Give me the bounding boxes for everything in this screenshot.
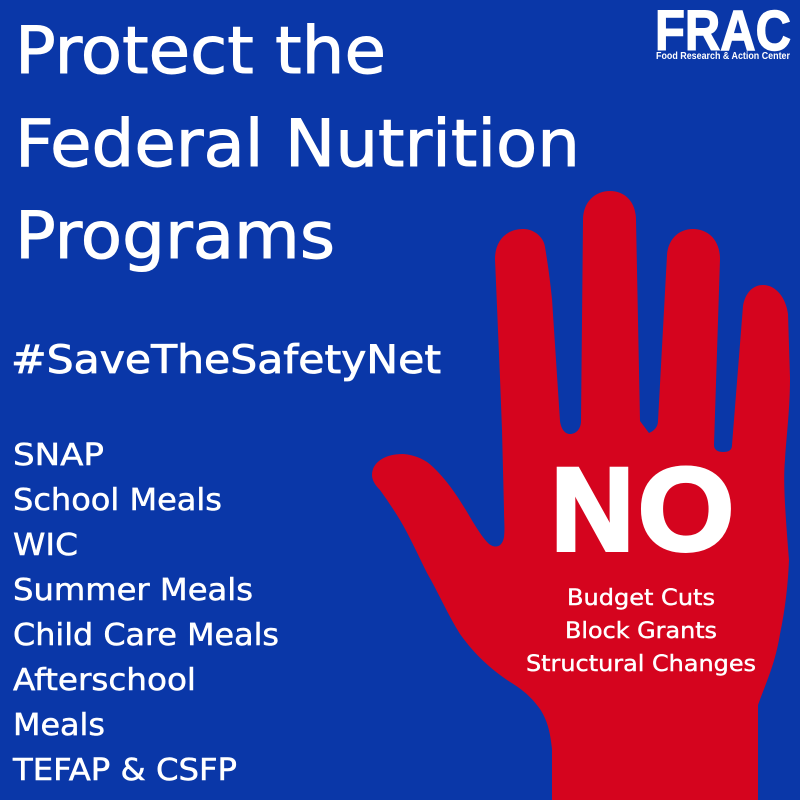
hand caption: Block Grants — [565, 619, 717, 644]
program list: WIC — [13, 528, 78, 563]
title — [15, 14, 580, 274]
program list: SNAP — [13, 438, 104, 473]
program list: Child Care Meals — [13, 618, 279, 653]
NO: O — [638, 444, 734, 576]
program list: Meals — [13, 708, 105, 743]
hand caption: Budget Cuts — [567, 586, 715, 611]
program list: Afterschool — [13, 663, 196, 698]
title: Federal Nutrition — [15, 107, 580, 182]
hashtag: #SaveTheSafetyNet — [11, 338, 441, 383]
program list — [12, 438, 279, 788]
title: Programs — [15, 199, 335, 274]
program list: TEFAP & CSFP — [12, 753, 237, 788]
program list: School Meals — [13, 483, 222, 518]
NO: N — [551, 444, 634, 576]
title: Protect the — [15, 14, 386, 89]
hand caption — [526, 586, 756, 677]
red hand — [372, 191, 790, 800]
program list: Summer Meals — [13, 573, 253, 608]
NO — [551, 444, 734, 576]
hand caption: Structural Changes — [526, 652, 756, 677]
